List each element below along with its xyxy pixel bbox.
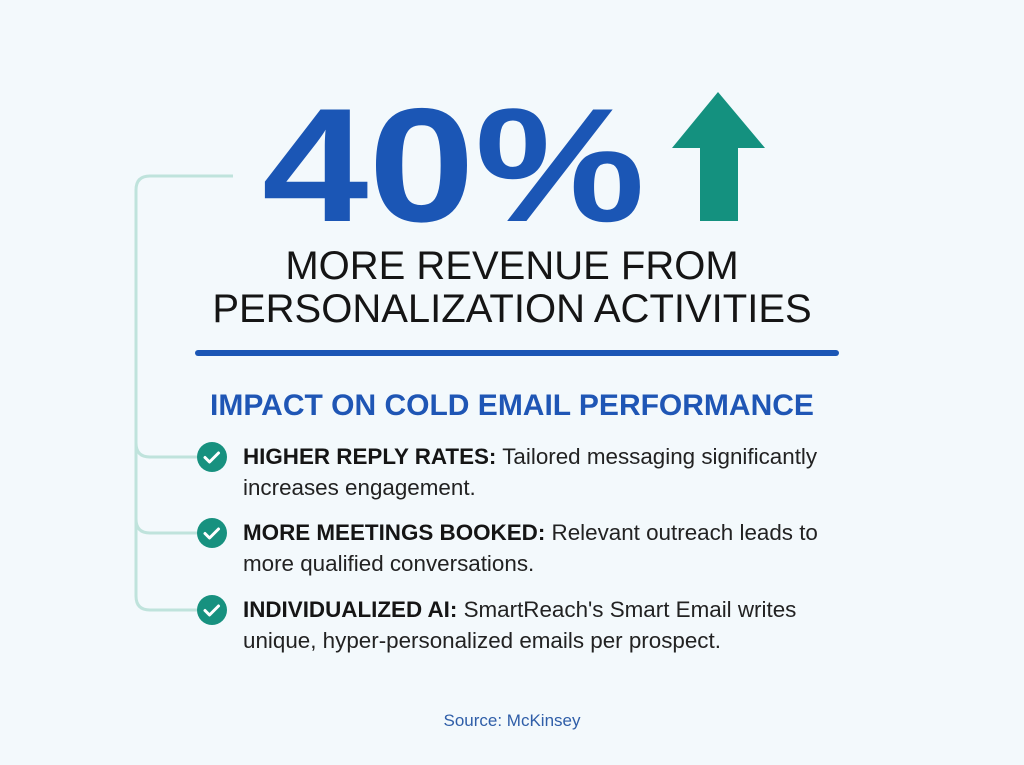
icon: check 3 xyxy=(197,595,227,625)
source: Source: McKinsey xyxy=(444,711,580,730)
bullet 2: MORE MEETINGS BOOKED: Relevant outreach leads to more qualified conversations. xyxy=(243,520,818,576)
icon: up arrow xyxy=(672,92,765,221)
icon: check 1 xyxy=(197,442,227,472)
divider bar xyxy=(195,350,839,356)
subtitle xyxy=(212,244,812,331)
bullet 1: HIGHER REPLY RATES: Tailored messaging significantly increases engagement. xyxy=(243,444,817,500)
heading: IMPACT ON COLD EMAIL PERFORMANCE xyxy=(210,389,814,422)
subtitle: PERSONALIZATION ACTIVITIES xyxy=(212,287,812,331)
headline stat xyxy=(262,75,765,240)
icon: check 2 xyxy=(197,518,227,548)
bullet 3: INDIVIDUALIZED AI: SmartReach's Smart Email writes unique, hyper-personalized emails per prospect. xyxy=(243,597,796,653)
subtitle: MORE REVENUE FROM xyxy=(285,244,739,288)
